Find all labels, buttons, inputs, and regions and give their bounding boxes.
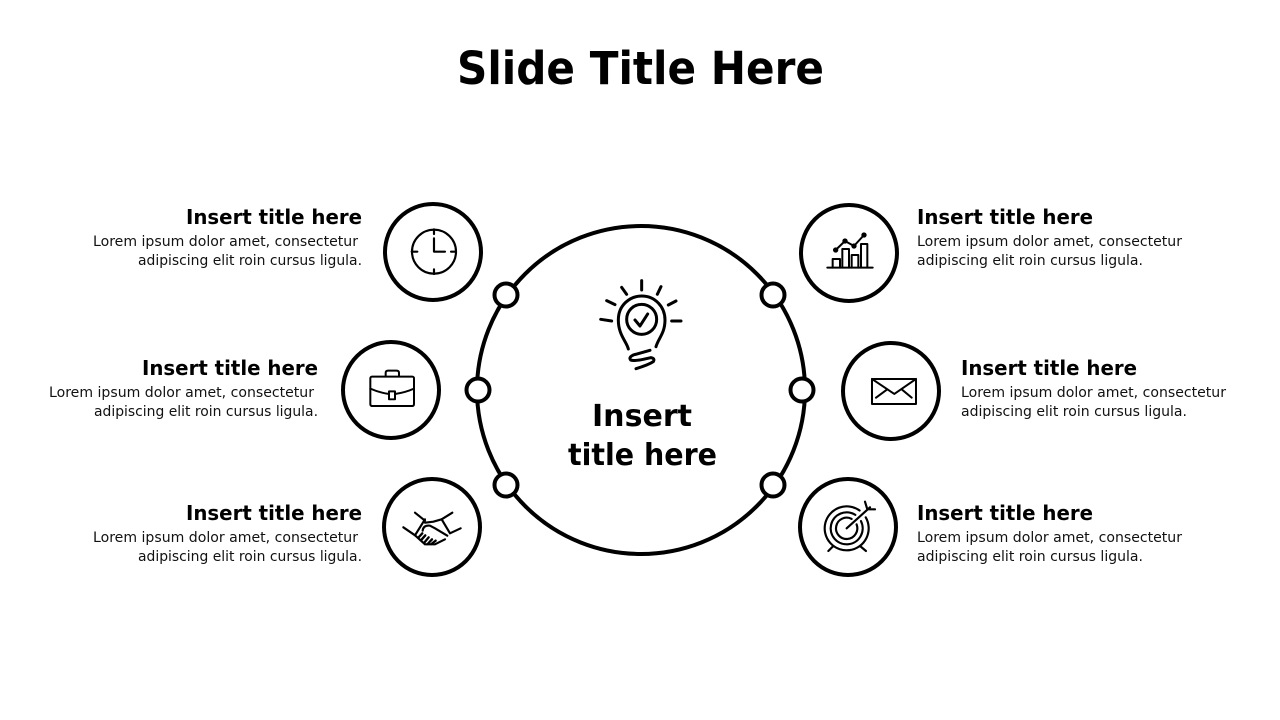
text block: Lorem ipsum dolor amet, consectetur: [917, 234, 1182, 250]
text block: Lorem ipsum dolor amet, consectetur: [93, 530, 358, 546]
item: envelope, middle right: [843, 343, 1226, 439]
central label: title here: [568, 438, 717, 473]
text block: Insert title here: [917, 205, 1093, 229]
icon circle: [843, 343, 939, 439]
item: clock, top left: [93, 204, 481, 300]
connector node: lower left: [494, 474, 518, 496]
central circle: [477, 226, 805, 554]
central hub: [466, 226, 814, 554]
item: handshake, bottom left: [93, 479, 480, 575]
text block: Lorem ipsum dolor amet, consectetur: [961, 385, 1226, 401]
item: bar chart, top right: [801, 205, 1182, 301]
title: Slide Title Here: [457, 42, 824, 95]
connector node: upper left: [494, 284, 518, 306]
item: briefcase, middle left: [49, 342, 439, 438]
icon: briefcase: [370, 371, 414, 406]
icon circle: [343, 342, 439, 438]
icon: target with arrow: [825, 502, 875, 551]
item: target, bottom right: [800, 479, 1182, 575]
text block: adipiscing elit roin cursus ligula.: [961, 404, 1187, 420]
text block: [49, 356, 318, 420]
text block: Insert title here: [961, 356, 1137, 380]
text block: [917, 501, 1182, 565]
central label: [568, 399, 717, 473]
text block: Lorem ipsum dolor amet, consectetur: [917, 530, 1182, 546]
text block: [961, 356, 1226, 420]
central label: Insert: [592, 399, 692, 434]
icon circle: [384, 479, 480, 575]
icon circle: [385, 204, 481, 300]
connector node: upper right: [762, 284, 784, 306]
text block: Lorem ipsum dolor amet, consectetur: [49, 385, 314, 401]
icon: envelope: [872, 379, 916, 404]
text block: [93, 501, 362, 565]
text block: [93, 205, 362, 269]
connector node: middle left: [466, 378, 490, 402]
text block: Lorem ipsum dolor amet, consectetur: [93, 234, 358, 250]
connector node: lower right: [762, 474, 784, 496]
icon circle: [800, 479, 896, 575]
icon: growth chart: [827, 233, 873, 268]
icon: handshake: [403, 513, 461, 544]
icon: light bulb with check: [601, 281, 681, 369]
text block: adipiscing elit roin cursus ligula.: [138, 253, 362, 269]
text block: Insert title here: [142, 356, 318, 380]
icon circle: [801, 205, 897, 301]
text block: Insert title here: [186, 501, 362, 525]
text block: adipiscing elit roin cursus ligula.: [917, 549, 1143, 565]
text block: [917, 205, 1182, 269]
text block: adipiscing elit roin cursus ligula.: [94, 404, 318, 420]
text block: adipiscing elit roin cursus ligula.: [138, 549, 362, 565]
text block: adipiscing elit roin cursus ligula.: [917, 253, 1143, 269]
text block: Insert title here: [186, 205, 362, 229]
icon: clock: [412, 229, 456, 274]
connector node: middle right: [790, 378, 814, 402]
text block: Insert title here: [917, 501, 1093, 525]
